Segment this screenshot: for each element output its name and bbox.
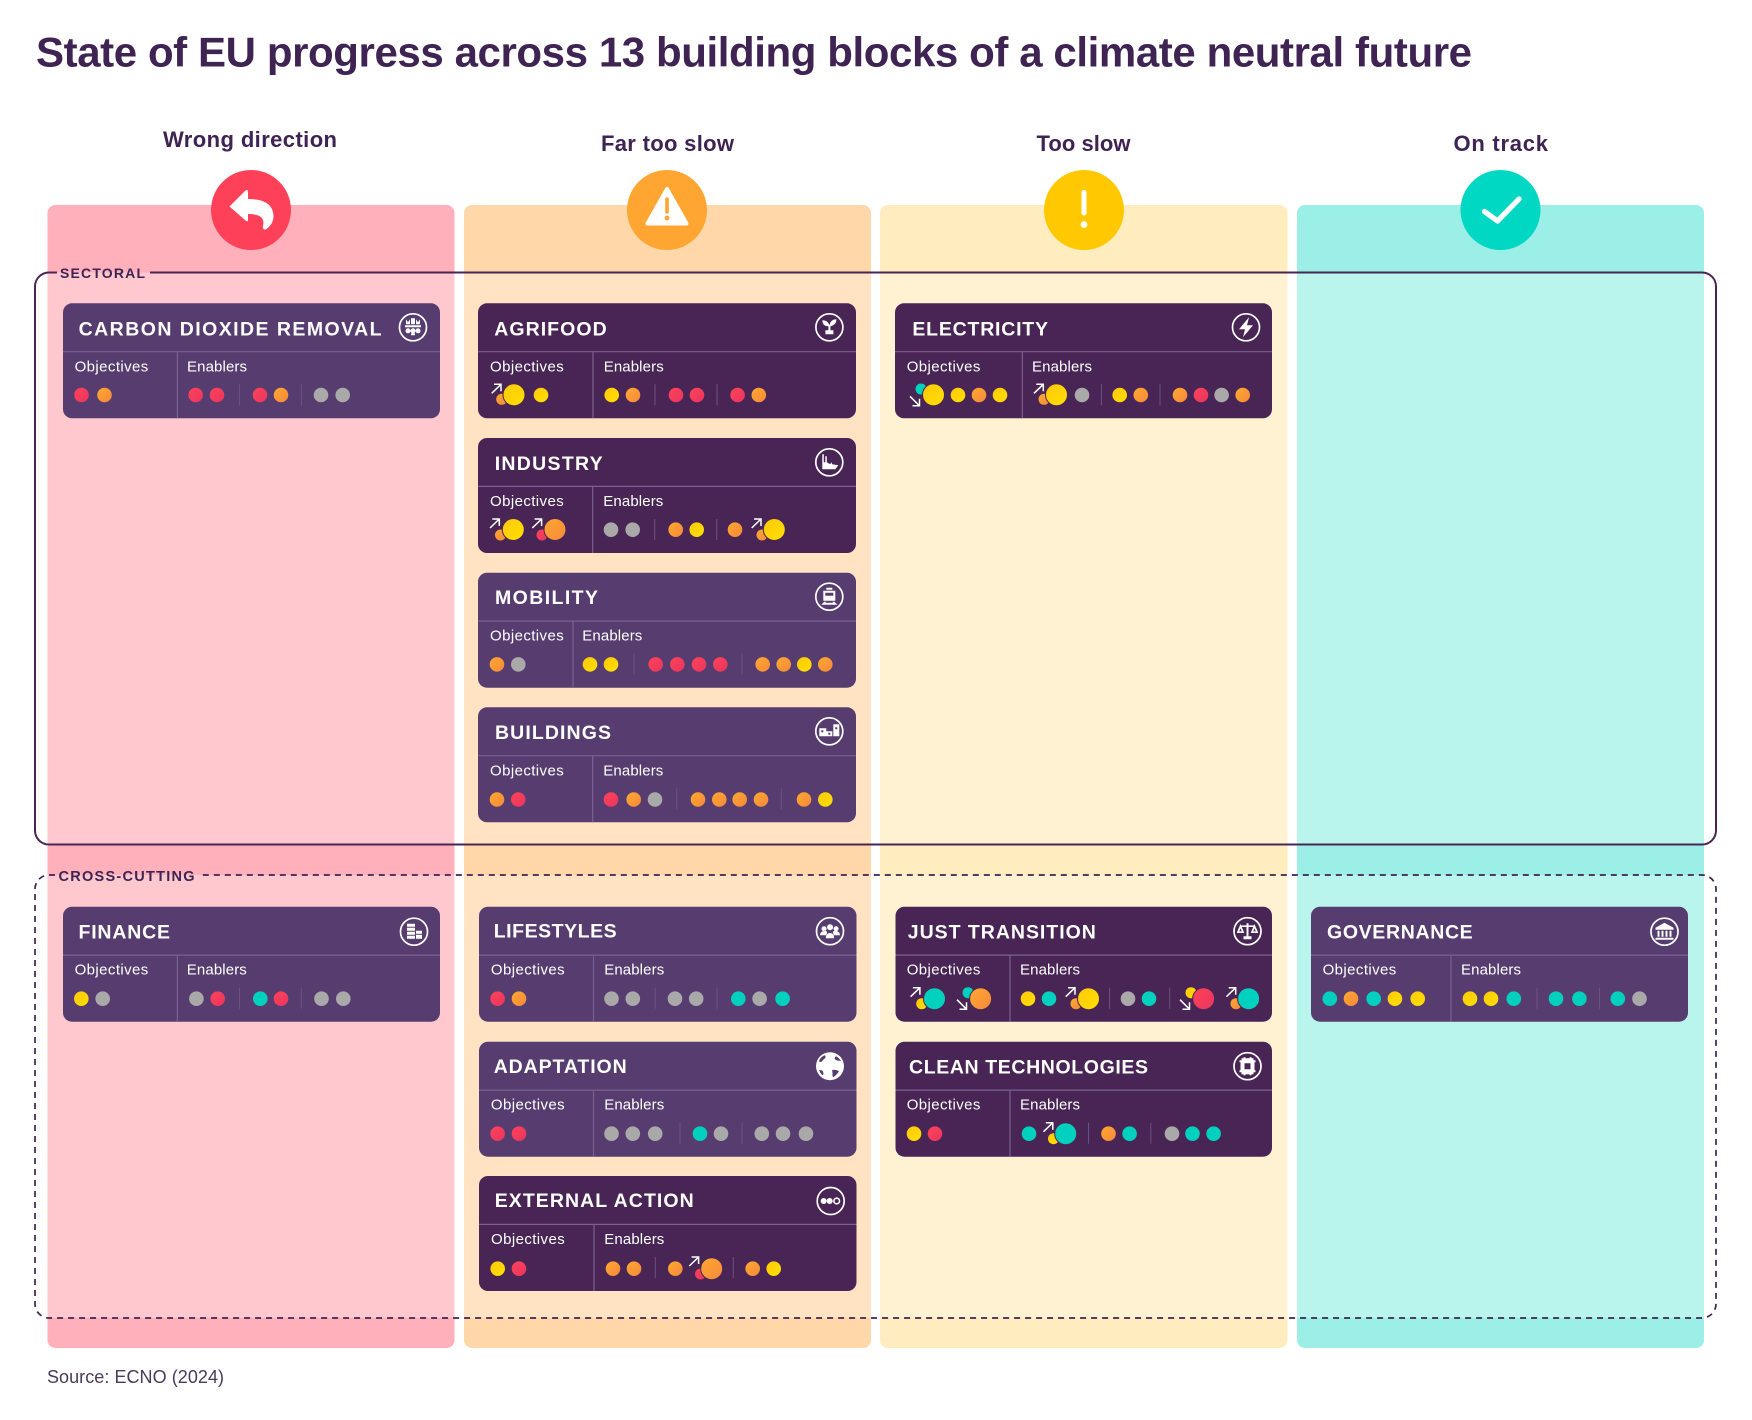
objectives label: Objectives [75, 358, 148, 375]
heading: JUST TRANSITION [908, 922, 1096, 944]
objectives label: Objectives [490, 762, 564, 779]
enabler dots [1463, 988, 1647, 1009]
enabler dots [1021, 987, 1260, 1010]
panel: on track column [1297, 205, 1704, 1348]
card: mobility [478, 573, 856, 688]
objective dots [490, 657, 526, 672]
enabler dots [604, 988, 790, 1009]
title: State of EU progress across 13 building blocks of a climate neutral future [36, 28, 1472, 76]
objectives label: Objectives [490, 628, 564, 645]
heading: BUILDINGS [495, 722, 611, 744]
enabler dots [1022, 1123, 1221, 1145]
heading: GOVERNANCE [1327, 922, 1473, 944]
objectives label: Objectives [491, 962, 565, 979]
enabler dots [1034, 384, 1250, 406]
objectives label: Objectives [1323, 962, 1396, 979]
icon: people [816, 918, 844, 945]
enablers label: Enablers [603, 762, 663, 779]
icon: scales [1234, 918, 1261, 945]
objectives label: Objectives [491, 1097, 565, 1114]
enablers label: Enablers [1020, 962, 1080, 979]
enablers label: Enablers [1020, 1097, 1080, 1114]
icon: globe [816, 1052, 844, 1080]
objective dots [74, 991, 110, 1006]
card: electricity [895, 303, 1272, 418]
panel: cross-cutting group tint [35, 875, 1716, 1318]
icon: coins [400, 918, 428, 945]
objective dots [490, 991, 526, 1006]
panel: sectoral group tint [35, 272, 1716, 844]
panel: far too slow column [464, 205, 871, 1348]
icon: tram [816, 583, 843, 610]
heading: far too slow: Far too slow [601, 131, 735, 156]
label: cross-cutting: CROSS-CUTTING [58, 869, 194, 885]
card: just transition [896, 907, 1272, 1022]
objectives label: Objectives [490, 358, 564, 375]
card: carbon dioxide removal [63, 303, 440, 418]
icon: far too slow [627, 170, 707, 250]
heading: too slow: Too slow [1036, 131, 1131, 156]
enablers label: Enablers [604, 1231, 664, 1248]
heading: MOBILITY [495, 587, 598, 609]
card: clean technologies [896, 1042, 1272, 1157]
objectives label: Objectives [491, 1231, 565, 1248]
heading: ELECTRICITY [912, 318, 1048, 340]
icon: connected dots [817, 1188, 844, 1214]
enablers label: Enablers [603, 493, 663, 510]
objective dots [910, 384, 1007, 406]
icon: carbon removal [400, 314, 426, 341]
objective dots [490, 518, 566, 540]
icon: sprout [816, 314, 843, 341]
objective dots [490, 792, 526, 807]
enablers label: Enablers [604, 358, 664, 375]
heading: EXTERNAL ACTION [495, 1190, 694, 1212]
objective dots [74, 388, 112, 402]
heading: on track: On track [1454, 131, 1549, 156]
card: agrifood [478, 303, 856, 418]
objectives label: Objectives [907, 1097, 980, 1114]
enabler dots [583, 654, 833, 675]
label: sectoral: SECTORAL [60, 265, 145, 281]
enablers label: Enablers [1461, 962, 1521, 979]
cross-cutting frame [35, 875, 1716, 1318]
enablers label: Enablers [1032, 358, 1092, 375]
heading: AGRIFOOD [494, 318, 607, 340]
heading: CARBON DIOXIDE REMOVAL [79, 318, 382, 340]
heading: wrong direction: Wrong direction [163, 127, 337, 152]
objective dots [492, 384, 548, 406]
enabler dots [188, 384, 350, 405]
icon: bank [1651, 918, 1678, 945]
sectoral frame [35, 272, 1716, 844]
card: buildings [478, 707, 856, 822]
card: industry [478, 438, 856, 553]
enabler dots [604, 788, 833, 809]
heading: LIFESTYLES [494, 921, 617, 943]
objectives label: Objectives [75, 962, 148, 979]
icon: lightning bolt [1232, 314, 1260, 341]
objectives label: Objectives [490, 493, 564, 510]
icon: factory [816, 449, 843, 476]
heading: FINANCE [78, 922, 170, 944]
card: lifestyles [479, 907, 856, 1022]
icon: on track [1460, 170, 1540, 250]
enabler dots [604, 384, 766, 405]
objective dots [490, 1126, 526, 1141]
heading: INDUSTRY [495, 453, 603, 475]
card: adaptation [479, 1042, 856, 1157]
enabler dots [604, 518, 785, 540]
icon: buildings [816, 718, 843, 745]
icon: chip [1234, 1053, 1261, 1080]
card: external action [479, 1176, 856, 1291]
objective dots [907, 1126, 942, 1141]
enablers label: Enablers [187, 358, 247, 375]
enabler dots [604, 1123, 813, 1144]
panel: wrong direction column [48, 205, 454, 1348]
enablers label: Enablers [604, 1097, 664, 1114]
card: governance [1311, 907, 1688, 1022]
heading: ADAPTATION [494, 1056, 627, 1078]
icon: too slow [1044, 170, 1124, 250]
icon: wrong direction [211, 170, 291, 250]
panel: too slow column [880, 205, 1288, 1348]
objectives label: Objectives [907, 358, 980, 375]
objectives label: Objectives [907, 962, 980, 979]
heading: CLEAN TECHNOLOGIES [909, 1057, 1148, 1079]
objective dots [490, 1261, 526, 1276]
enablers label: Enablers [187, 962, 247, 979]
objective dots [1322, 991, 1425, 1006]
source note: Source: ECNO (2024) [47, 1367, 224, 1387]
enablers label: Enablers [604, 962, 664, 979]
enablers label: Enablers [582, 628, 642, 645]
enabler dots [189, 988, 351, 1009]
objective dots [911, 987, 992, 1010]
card: finance [63, 907, 440, 1022]
enabler dots [606, 1257, 781, 1280]
